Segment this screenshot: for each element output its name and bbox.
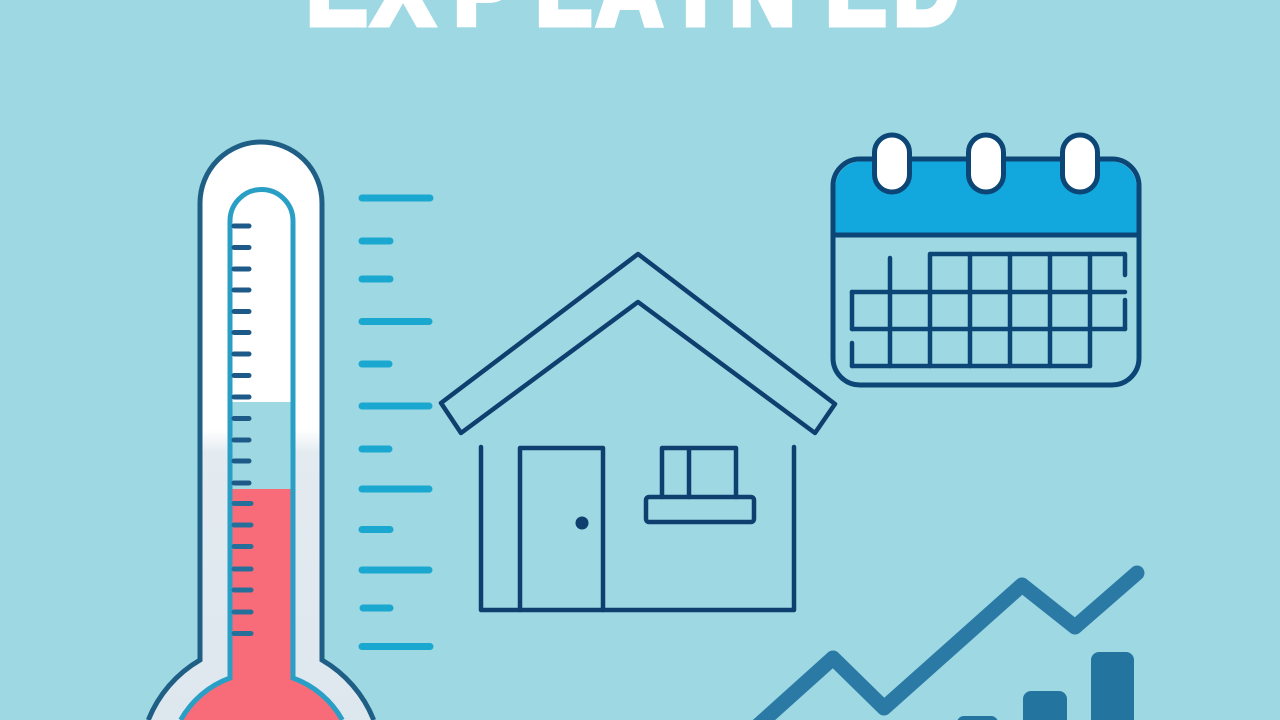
thermometer glass fill: [148, 142, 374, 720]
house door: [520, 448, 603, 610]
icon: thermometer: [148, 142, 374, 720]
trend line: [833, 573, 1137, 708]
house window: [662, 448, 736, 497]
thermometer inner ticks: [234, 226, 251, 634]
door knob: [576, 516, 588, 530]
house walls: [481, 447, 794, 610]
icon: house: [441, 254, 835, 610]
calendar body: [833, 159, 1139, 385]
calendar rings: [874, 135, 1098, 192]
thermometer inner tube edge: [181, 190, 342, 720]
scale ticks: [362, 198, 430, 646]
calendar header: [836, 162, 1136, 235]
thermometer inner tube fill: [181, 190, 342, 720]
trend line tail: [753, 652, 838, 720]
line and bar chart: [753, 573, 1137, 720]
house roof: [441, 254, 835, 433]
bars: [957, 652, 1134, 720]
window sill: [646, 497, 754, 522]
thermometer cool band: [232, 402, 291, 490]
thermometer red liquid: [181, 489, 342, 720]
thermometer glass outline: [148, 142, 374, 720]
icon: calendar: [833, 135, 1139, 385]
calendar date grid: [852, 254, 1125, 366]
